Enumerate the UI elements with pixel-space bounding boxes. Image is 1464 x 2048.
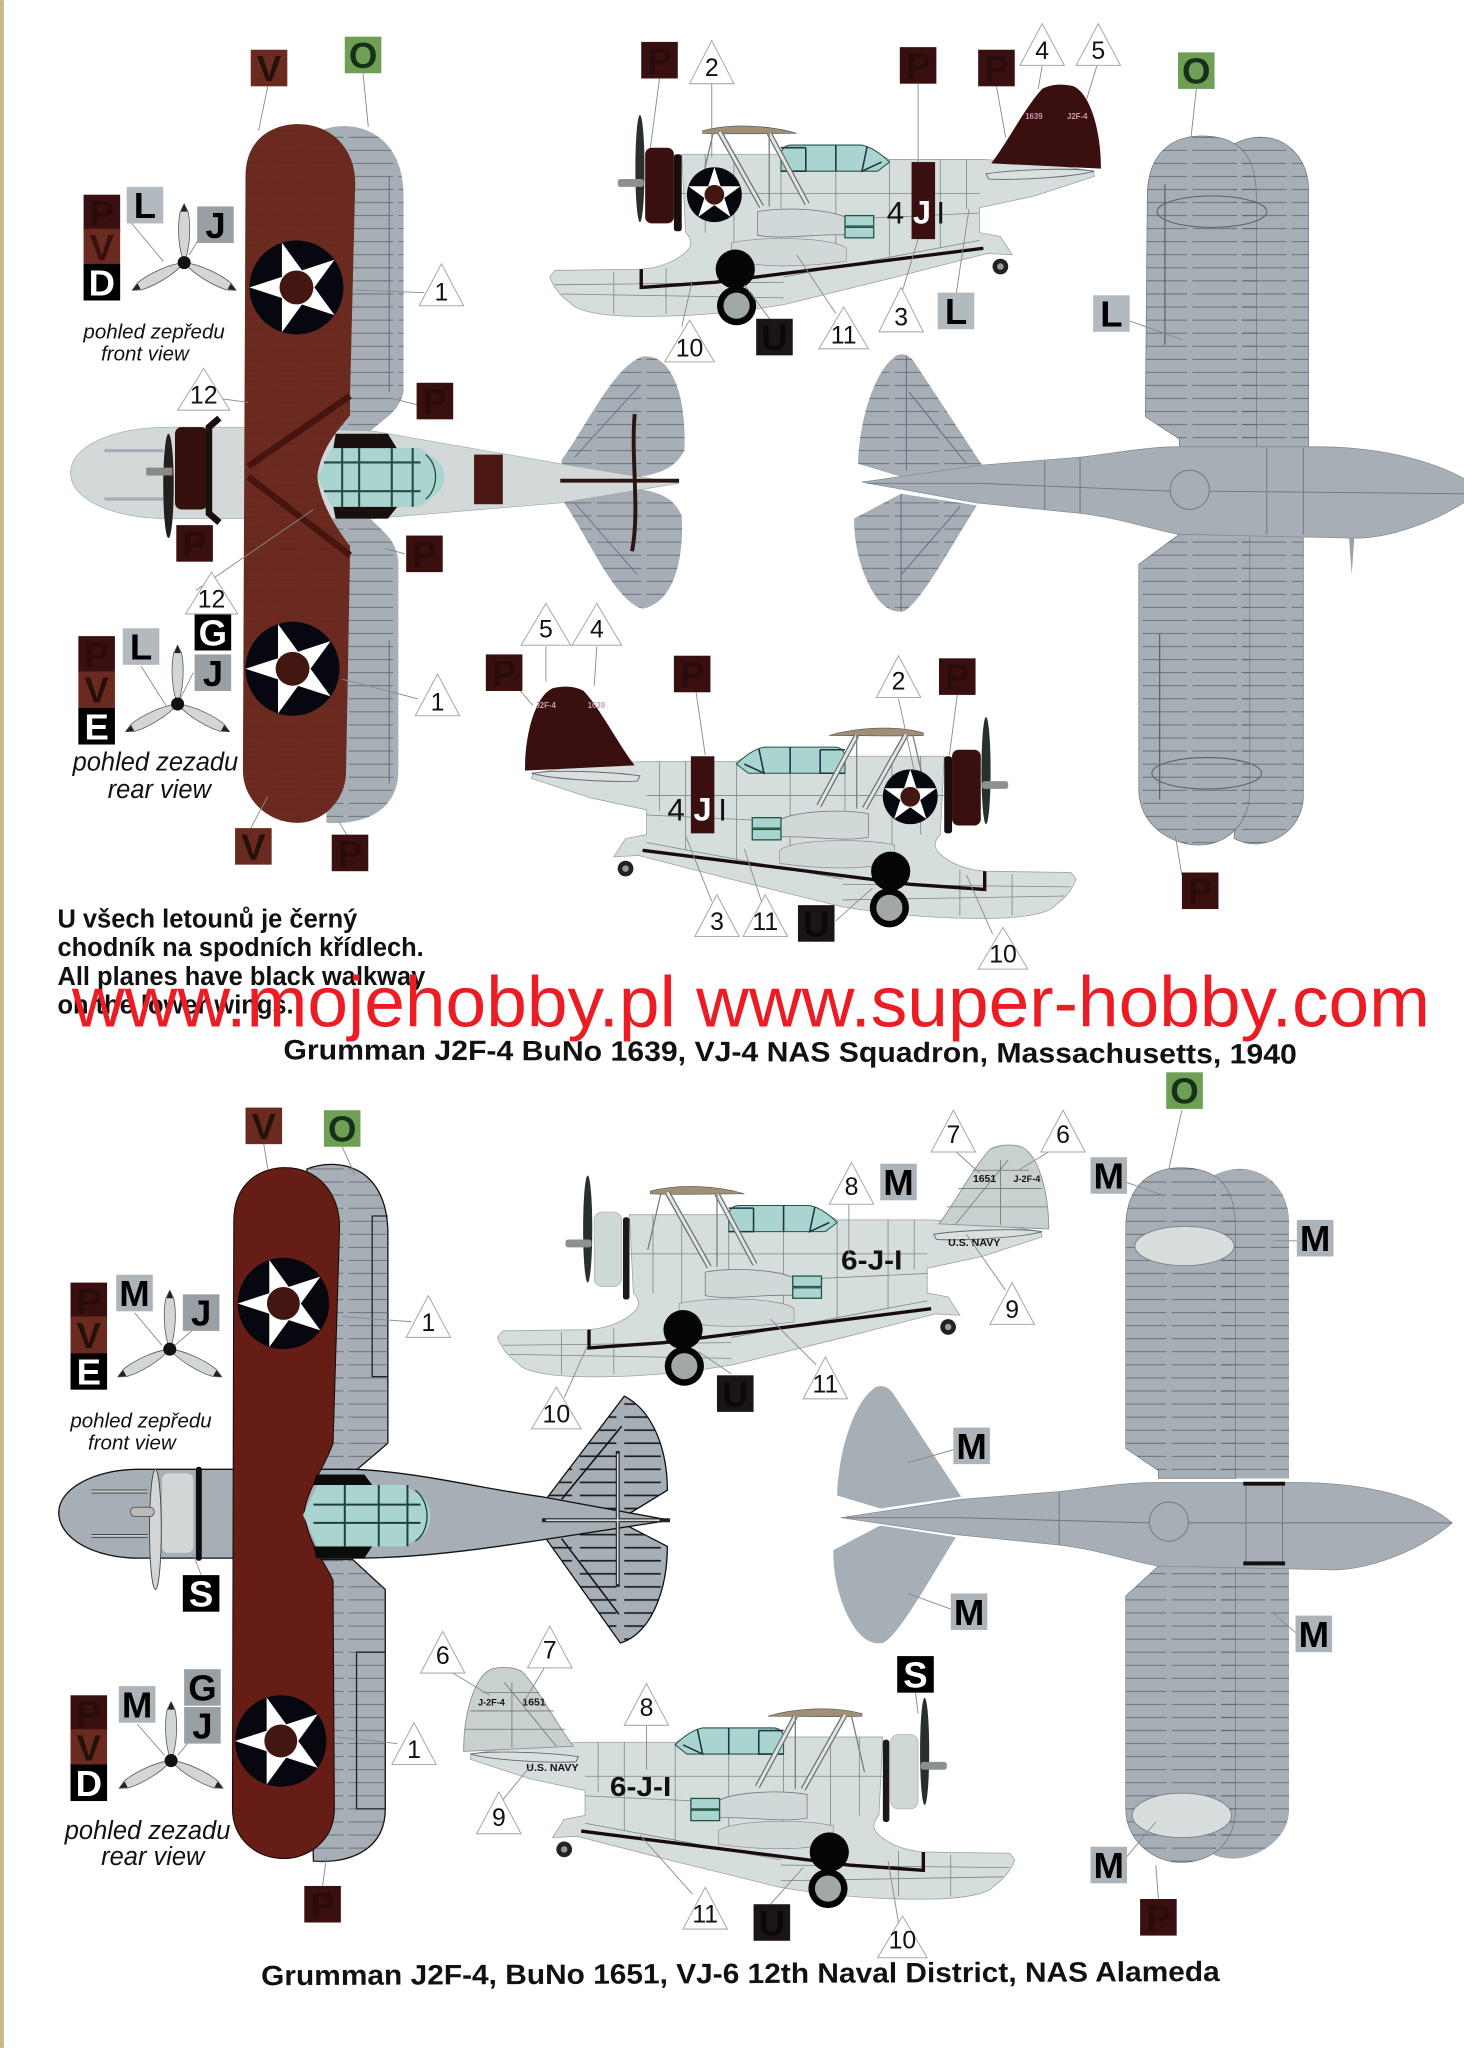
roundel [687,167,742,222]
aircraft 2 side view mirrored [464,1667,1015,1908]
fuselage [71,427,679,519]
upper wing [232,1168,340,1859]
aircraft 1 side view mirrored [525,687,1076,927]
colour codes aircraft 1: P [90,193,114,234]
tail planes [854,354,982,612]
aircraft 1 underside plan view [854,136,1464,845]
colour codes aircraft 1: V [90,227,115,268]
numbered callouts: 3 [710,909,724,936]
watermark: www.mojehobby.pl www.super-hobby.com [71,963,1430,1043]
float shape top [1135,1226,1234,1266]
fuselage details [867,448,1464,534]
aircraft 1 side view right-facing tail: I [936,195,945,230]
colour codes aircraft 2: U [759,1903,785,1944]
engine cowl [104,418,219,538]
numbered callouts: 12 [198,586,225,613]
numbered callouts: 6 [436,1643,450,1670]
numbered callouts: 2 [705,55,719,82]
colour codes aircraft 1: O [1182,51,1210,92]
colour codes aircraft 1: P [423,381,447,422]
colour codes aircraft 1: L [130,627,152,668]
upper wing [243,124,355,823]
page edge [0,0,4,2048]
colour codes aircraft 1: L [1100,294,1123,335]
colour codes aircraft 2: V [77,1728,102,1769]
dark tail fin [525,687,635,771]
colour codes aircraft 2: J [192,1705,213,1746]
cowling [645,148,682,231]
fin and hinge [560,414,679,551]
lower wing [307,1164,388,1861]
colour codes aircraft 2: D [76,1763,102,1804]
wing struts marks [248,396,350,555]
aircraft 1 side view mirrored: J [693,790,712,827]
cowling [883,1734,918,1822]
code: 4 [667,792,685,827]
colour codes aircraft 2: M [954,1592,984,1633]
numbered callouts: 9 [492,1805,506,1832]
aircraft 1 side view right-facing tail: J2F-4 [1067,112,1088,121]
numbered callouts: 11 [692,1902,718,1929]
numbered callouts: 11 [752,909,778,936]
cowling [944,750,981,833]
colour codes aircraft 1: P [984,48,1009,89]
numbered callouts: 11 [831,323,857,350]
colour codes aircraft 1: G [199,612,227,653]
fuselage stripe [474,455,503,504]
aircraft 1 side view mirrored: 1639 [588,701,606,710]
colour codes aircraft 1: P [182,523,207,564]
fuselage [59,1469,670,1558]
tail planes [833,1386,961,1643]
leader lines [131,65,1297,1923]
stripe [691,756,714,833]
aircraft 2 title: Grumman J2F-4, BuNo 1651, VJ-6 12th Naval District, NAS Alameda [261,1956,1220,1991]
colour codes aircraft 2: P [1146,1897,1171,1938]
colour codes aircraft 2: M [119,1273,150,1314]
colour codes aircraft 2 [71,1071,1333,1944]
colour codes aircraft 2: P [77,1281,101,1322]
tail detail [542,1451,670,1587]
colour codes aircraft 2: M [122,1684,152,1725]
numbered callouts: 1 [421,1310,435,1337]
view captions: rear view [108,776,213,804]
colour codes aircraft 1: O [349,35,377,76]
colour codes aircraft 1: D [89,262,115,303]
roundel [883,769,938,824]
colour codes aircraft 2: V [77,1315,102,1356]
aircraft 2 side view: U.S. NAVY [948,1238,1000,1249]
float outline bottom [1152,758,1262,789]
tail planes [546,1396,667,1643]
view captions [64,320,238,1871]
colour codes aircraft 2: M [1094,1845,1124,1886]
code: 6-J-I [610,1771,671,1802]
colour codes aircraft 1: J [205,205,226,246]
propeller rear view 1 [123,645,232,737]
colour codes aircraft 1: V [84,670,109,711]
colour codes aircraft 1: V [241,826,266,867]
view captions: front view [101,343,190,366]
walkway note: on the lower wings. [57,992,294,1020]
colour codes aircraft 1: U [761,317,788,358]
float shape bottom [1132,1793,1232,1838]
aircraft 2 top plan view [59,1164,670,1861]
numbered callouts: 4 [590,616,604,643]
colour codes aircraft 1: L [134,185,156,226]
view captions: pohled zepředu [69,1410,212,1433]
view captions: pohled zepředu [82,320,225,343]
colour codes aircraft 2: M [956,1426,987,1467]
aircraft 1 side view right-facing tail [550,85,1101,325]
aircraft 1 side view mirrored: I [718,792,727,827]
walkway note [57,905,426,1020]
colour codes aircraft 2: J [191,1293,211,1334]
numbered callouts: 1 [435,279,448,306]
aircraft 2 side view [498,1145,1049,1386]
colour codes aircraft 2: S [903,1654,928,1695]
wings [1126,1168,1289,1862]
numbered callouts: 5 [539,616,553,643]
cockpit [317,434,445,519]
wing struts [1243,1484,1285,1563]
numbered callouts: 1 [407,1737,421,1764]
colour codes aircraft 1: L [945,291,967,332]
numbered callouts: 10 [989,942,1017,969]
cowling [594,1212,629,1300]
numbered callouts: 8 [845,1174,858,1201]
walkway note: U všech letounů je černý [57,905,358,933]
tail planes [562,356,685,609]
colour codes aircraft 2: M [883,1162,914,1203]
aircraft 2 side view mirrored: 1651 [522,1698,546,1709]
colour codes aircraft 1: P [647,40,672,81]
roundel upper [238,1258,329,1349]
aircraft 2 side view mirrored: U.S. NAVY [526,1763,579,1774]
tail fin [464,1667,573,1751]
colour codes aircraft 1: P [338,833,362,874]
numbered callouts: 4 [1035,38,1049,65]
colour codes aircraft 2: E [77,1351,101,1392]
colour codes aircraft 1: P [1188,871,1212,912]
lower wing [320,126,404,823]
numbered callouts: 10 [543,1401,570,1428]
colour codes aircraft 1: P [84,634,109,675]
numbered callouts: 1 [431,690,444,717]
roundel lower [235,1695,326,1787]
numbered callouts: 6 [1056,1122,1070,1149]
colour codes aircraft 1: E [84,706,109,747]
colour codes aircraft 1: P [680,654,704,695]
colour codes aircraft 1 [78,35,1218,944]
roundel upper [249,240,343,334]
colour codes aircraft 1: P [412,534,437,575]
view captions: rear view [101,1843,206,1871]
dark tail fin [991,85,1101,169]
colour codes aircraft 1: P [945,657,969,698]
fin tip [1349,538,1354,575]
numbered callouts: 2 [892,669,905,696]
numbered callouts: 10 [676,336,703,363]
numbered callouts: 7 [543,1638,557,1665]
numbered callouts: 9 [1005,1297,1019,1324]
walkway note: chodník na spodních křídlech. [57,934,424,962]
numbered callouts: 3 [894,304,908,331]
fuselage [841,1482,1452,1570]
aircraft 1 title: Grumman J2F-4 BuNo 1639, VJ-4 NAS Squadron, Massachusetts, 1940 [283,1034,1297,1070]
aircraft 1 top plan view [71,124,685,823]
roundel lower [246,622,340,716]
numbered callouts: 12 [190,383,218,410]
numbered callouts: 7 [946,1122,960,1149]
cockpit [303,1475,430,1558]
colour codes aircraft 1: U [803,903,829,944]
fin text: J-2F-4 [478,1698,506,1708]
propeller front view 2 [115,1290,224,1382]
numbered callouts: 11 [813,1371,838,1398]
numbered callouts: 8 [640,1695,653,1722]
colour codes aircraft 2: O [328,1109,356,1150]
float outline top [1157,196,1267,227]
propeller rear view 2 [117,1702,226,1793]
colour codes aircraft 2: P [77,1694,101,1735]
colour codes aircraft 2: M [1299,1614,1329,1655]
colour codes aircraft 2: S [189,1573,213,1614]
view captions: pohled zezadu [64,1817,230,1845]
walkway note: All planes have black walkway [57,963,426,991]
colour codes aircraft 2: U [722,1374,748,1415]
colour codes aircraft 1: P [906,45,930,86]
propeller front view 1 [130,204,239,295]
stripe [912,162,935,239]
numbered callouts: 5 [1091,38,1105,65]
colour codes aircraft 2: M [1300,1218,1330,1259]
fuselage [862,447,1464,538]
view captions: front view [88,1432,177,1455]
colour codes aircraft 2: G [188,1667,217,1708]
colour codes aircraft 2: P [310,1884,335,1925]
fin text: 1651 [973,1174,996,1185]
fuselage details [846,1482,1452,1566]
numbered callouts: 10 [889,1928,916,1955]
numbered callouts [178,24,1121,1958]
colour codes aircraft 2: M [1094,1156,1124,1197]
code: 4 [887,195,904,230]
colour codes aircraft 1: J [203,653,223,694]
view captions: pohled zezadu [72,749,238,777]
wings [1139,136,1309,845]
colour codes aircraft 2: O [1170,1071,1199,1112]
fin text: J2F-4 [535,701,557,710]
aircraft 1 side view right-facing tail: J [913,193,931,230]
aircraft 2 underside plan view [833,1168,1452,1862]
colour codes aircraft 2: V [252,1106,277,1147]
colour codes aircraft 1: V [257,48,282,89]
colour codes aircraft 1: P [492,653,516,694]
code: 6-J-I [841,1245,902,1276]
fin text: 1639 [1025,112,1043,121]
nose detail [91,1467,202,1589]
aircraft 2 side view: J-2F-4 [1013,1174,1041,1184]
tail fin [939,1145,1049,1229]
